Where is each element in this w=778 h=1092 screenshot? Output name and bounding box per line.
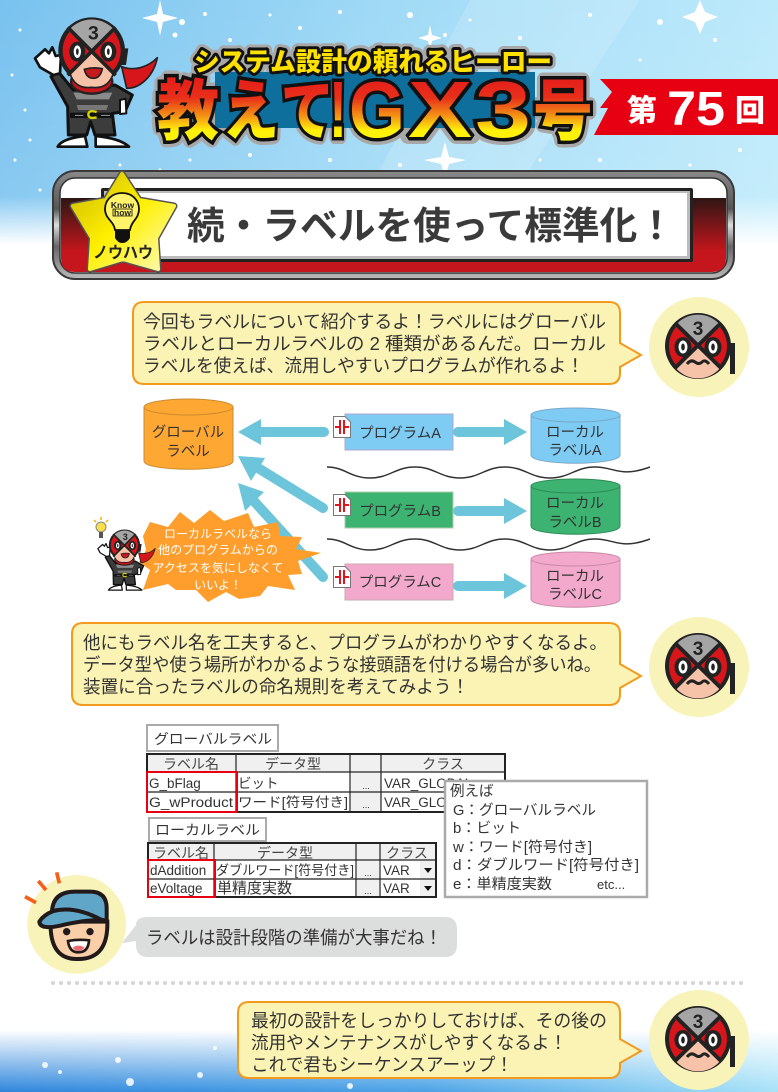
program B [334,492,453,528]
speech bubble 4: 最初の設計をしっかりしておけば、その後の [251,1011,607,1031]
know-how star badge [73,174,174,269]
cylinder: local label A [531,408,620,463]
logo grey outline of subtitle: システム設計の頼れるヒーロー [194,47,552,77]
program C: プログラムC [359,574,441,591]
local label table: ラベル名 [153,845,209,861]
example legend box: G：グローバルラベル [453,802,596,819]
logo main title [157,65,593,154]
local label heading: ローカルラベル [155,822,260,838]
program A [334,414,453,450]
heading: 続・ラベルを使って標準化！ [187,206,675,248]
speech bubble 2: データ型や使う場所がわかるような接頭語を付ける場合が多いね。 [83,655,601,675]
series logo [157,47,593,154]
title plate [53,171,734,279]
worker character [25,872,126,974]
cylinder: local label C: ラベルC [548,587,602,603]
logo grey outline of main title: て [281,74,334,148]
hero character [35,17,157,147]
icon: light bulb [105,193,139,243]
example legend box: etc... [597,877,625,892]
wavy divider [327,467,650,478]
local label table: VAR [383,881,410,896]
logo main title: X [408,65,472,154]
logo main title: て [281,74,334,148]
speech bubble 3 [122,917,457,957]
speech bubble 2: 装置に合ったラベルの命名規則を考えてみよう！ [83,677,469,697]
logo main title: ! [329,65,347,154]
avatar: GX3 [649,617,749,717]
logo grey outline of main title: え [222,74,279,148]
example legend box: e：単精度実数 [453,876,553,893]
local label table: dAddition [150,863,206,878]
logo main title: え [222,74,279,148]
local label table [148,843,436,897]
global label heading [147,725,278,751]
red highlight: global names [147,772,237,812]
avatar: GX3 [649,990,749,1090]
global label table: G_bFlag [149,776,201,791]
icon: idea bulb [94,517,108,538]
local label table: ダブルワード[符号付き] [216,862,354,878]
global label table: VAR_GLOBAL [384,776,473,791]
diagram: global and local labels [94,399,650,607]
cylinder: global label [144,399,233,469]
know-how star badge: ノウハウ [93,244,153,262]
speech bubble 4: 流用やメンテナンスがしやすくなるよ！ [251,1033,567,1053]
local label table: VAR [383,863,410,878]
logo main title: 号 [533,74,593,148]
logo grey outline of main title: 3 [475,65,531,154]
logo main title: G [349,65,405,154]
red highlight: local names [148,860,215,897]
cylinder: local label A: ラベルA [548,443,602,459]
speech bubble 2: 他にもラベル名を工夫すると、プログラムがわかりやすくなるよ。 [83,633,607,653]
speech bubble 1: ラベルを使えば、流用しやすいプログラムが作れるよ！ [143,356,584,376]
red episode tag [594,79,778,136]
cylinder: local label C [531,552,620,607]
cylinder: global label: ラベル [166,444,210,460]
global label table: ラベル名 [163,756,219,772]
speech bubble 1: ラベルとローカルラベルの 2 種類があるんだ。ローカル [143,334,606,354]
global label table [147,754,505,812]
local label table: ... [364,868,372,878]
bottom sea background [0,1030,778,1092]
icon: light bulb: Know [111,200,134,210]
callout burst: 他のプログラムからの [158,543,278,557]
program A: プログラムA [359,425,441,442]
global label table: VAR_GLOBAL [384,795,473,810]
local label table: 単精度実数 [217,880,292,897]
logo banner backing [215,72,535,128]
speech bubble 4 [238,1002,641,1078]
callout burst: ローカルラベルなら [164,527,272,541]
global label table: G_wProduct [149,795,233,810]
global label table: クラス [422,756,464,772]
local label table: クラス [386,845,428,861]
example legend box: b：ビット [453,820,521,837]
logo grey outline of main title: 教 [157,74,219,148]
program C [334,564,453,600]
logo subtitle: システム設計の頼れるヒーロー [194,47,552,77]
logo grey outline of main title [157,65,593,154]
callout burst: いいよ！ [194,578,242,592]
icon: light bulb: how [114,208,131,218]
example legend box: d：ダブルワード[符号付き] [453,856,639,874]
global label table: データ型 [265,756,321,772]
logo main title: 教 [157,74,219,148]
local label table: eVoltage [150,881,203,896]
small hero pointing [98,529,155,590]
global label table: ... [362,800,370,810]
callout burst: アクセスを気にしなくて [152,560,284,575]
speech bubble 1: 今回もラベルについて紹介するよ！ラベルにはグローバル [143,312,606,332]
cylinder: local label A: ローカル [546,425,604,441]
global label table: ビット [238,776,278,791]
example legend box [445,781,647,897]
global label table: ワード[符号付き] [238,795,348,810]
global label table: ... [362,781,370,791]
local label heading [149,818,266,841]
speech bubble 2 [72,623,641,705]
logo grey outline of main title: X [408,65,472,154]
logo grey outline of main title: 号 [533,74,593,148]
avatar: GX3 [649,297,749,397]
logo grey outline of main title: ! [329,65,347,154]
cylinder: local label C: ローカル [546,569,604,585]
header sky background [0,0,778,245]
arrows [238,419,527,599]
cylinder: global label: グローバル [152,424,224,441]
speech bubble 4: これで君もシーケンスアーップ！ [251,1055,513,1075]
speech bubble 3: ラベルは設計段階の準備が大事だね！ [146,928,442,948]
logo main title: 3 [475,65,531,154]
local label table: ... [364,886,372,896]
red episode tag: 75 [667,83,725,136]
example legend box: 例えば [450,783,494,800]
dotted divider line [53,981,749,985]
program B: プログラムB [359,503,441,520]
global label heading: グローバルラベル [154,731,272,747]
red episode tag: 第 [627,95,657,128]
speech bubble 1 [133,302,641,384]
cylinder: local label B: ローカル [546,496,604,512]
example legend box: w：ワード[符号付き] [452,839,592,856]
logo grey outline of main title: G [349,65,405,154]
wavy divider [327,539,650,550]
callout burst [139,510,321,602]
cylinder: local label B [531,479,620,534]
cylinder: local label B: ラベルB [548,515,602,531]
local label table: データ型 [257,845,313,861]
red episode tag: 回 [735,95,765,128]
